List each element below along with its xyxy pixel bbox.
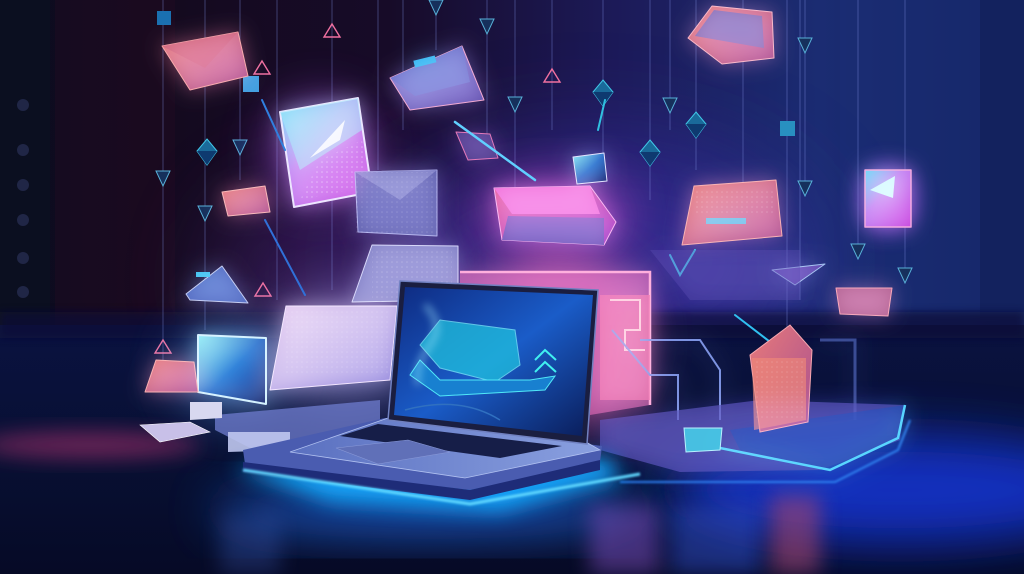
card: large purple xyxy=(280,98,372,207)
small cyan card on platform xyxy=(684,428,722,452)
envelope: pink large centre xyxy=(494,186,616,245)
envelope: top left salmon xyxy=(162,32,248,90)
right house envelope xyxy=(750,325,812,432)
bloom over envelopes xyxy=(145,6,911,404)
right platform xyxy=(600,400,910,482)
envelope: below pale centre xyxy=(352,245,458,302)
laptop xyxy=(232,281,640,512)
envelope: pale right floating xyxy=(772,264,825,285)
envelope: large pale near laptop xyxy=(270,306,397,390)
neon pink tower behind laptop xyxy=(460,250,855,420)
envelope: small mid open xyxy=(456,132,498,160)
envelope: right pink small xyxy=(836,288,892,316)
envelope: small left salmon xyxy=(222,186,270,216)
envelope: small salmon bottom left xyxy=(145,360,198,392)
bloom over tower and platform xyxy=(460,250,910,482)
floating envelopes xyxy=(145,6,911,404)
laptop platform xyxy=(243,418,640,504)
envelope: top right xyxy=(688,6,774,64)
left platform and blocks xyxy=(140,400,380,452)
envelope: small blue left xyxy=(186,266,248,303)
reflective floor xyxy=(0,312,1024,574)
laptop screen xyxy=(388,281,598,444)
light beams xyxy=(262,100,778,348)
laptop deck xyxy=(290,418,600,478)
background wall xyxy=(0,0,1024,380)
card: right purple xyxy=(865,170,911,227)
hanging threads xyxy=(163,0,905,370)
envelope: pale centre xyxy=(355,170,437,236)
envelope: right salmon tent xyxy=(682,180,782,245)
small hanging diamonds and triangles xyxy=(155,0,912,353)
glow behind central scene xyxy=(180,100,918,430)
card: blue near left xyxy=(198,335,266,404)
envelope: small cyan near pink xyxy=(573,153,607,184)
envelope: top centre lilac xyxy=(390,46,484,110)
laptop base glow xyxy=(232,458,620,512)
